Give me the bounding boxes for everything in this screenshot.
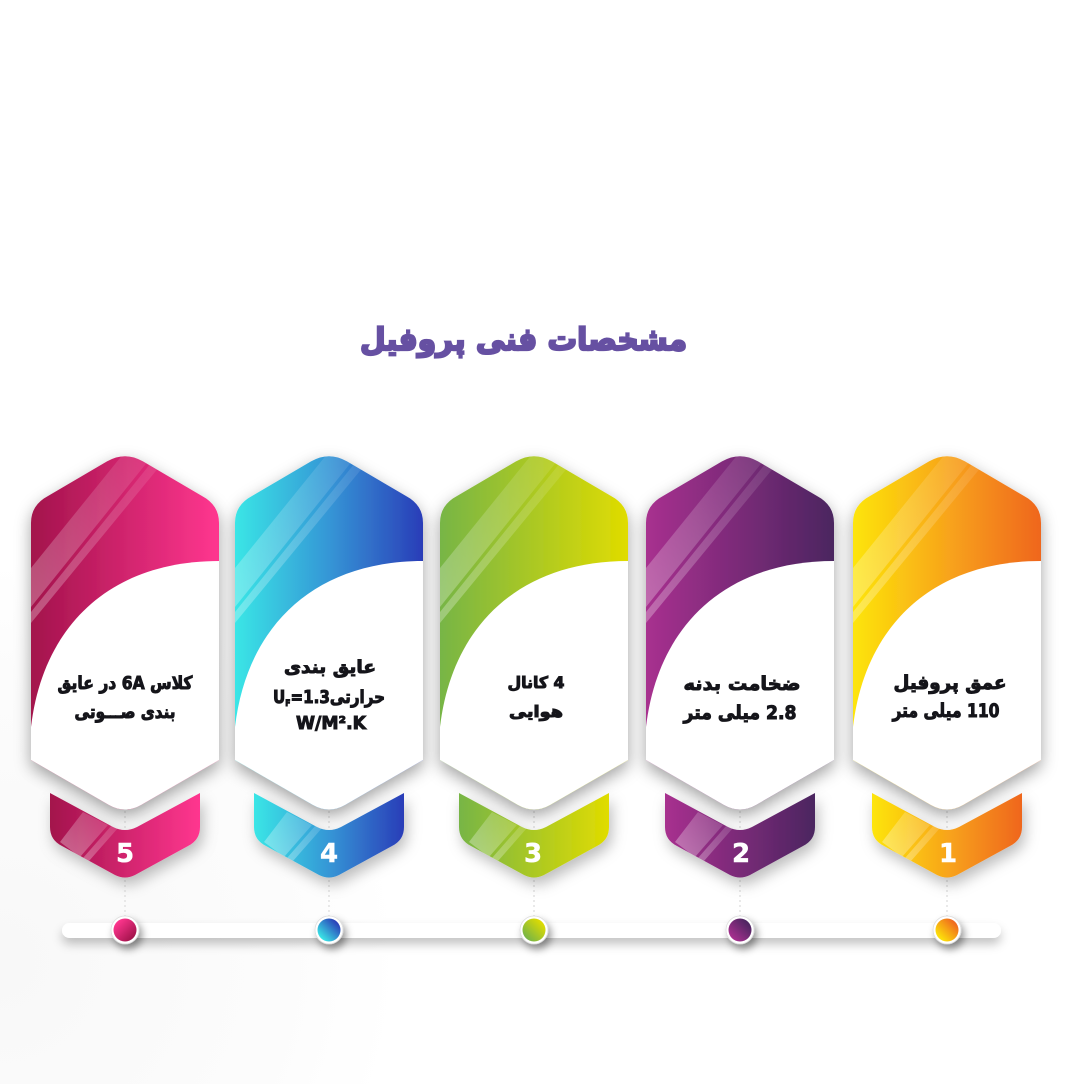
card 3 text	[508, 673, 564, 721]
card 5 text: بندی صـــوتی	[74, 702, 176, 723]
card 5 hexagon	[31, 456, 219, 810]
card 2 number tab: 2	[732, 839, 750, 869]
card 1 number tab: 1	[939, 839, 957, 869]
card 5 number tab	[50, 793, 200, 878]
card 1 text: عمق پروفیل	[894, 672, 1006, 694]
timeline bar	[62, 923, 1001, 938]
card 2 number tab	[665, 793, 815, 878]
card 4: thermal insulation	[235, 448, 423, 878]
card 4 number tab	[254, 793, 404, 878]
card 1: profile depth	[853, 448, 1041, 878]
card 4 hexagon	[235, 456, 423, 810]
card 2 white body	[646, 561, 834, 810]
card 5 number tab: 5	[116, 839, 134, 869]
card 1 text	[892, 672, 1006, 722]
card 3 text: 4 کانال	[508, 673, 564, 692]
card 4 text: عایق بندی	[284, 657, 376, 678]
timeline node 3	[520, 916, 548, 944]
connector dots	[125, 811, 947, 917]
card 4 gloss	[235, 456, 361, 623]
card 2 text: 2.8 میلی متر	[683, 702, 796, 724]
card 3: air channels	[440, 448, 628, 878]
card 1 white body	[853, 561, 1041, 810]
title: مشخصات فنی پروفیل	[360, 322, 687, 358]
card 1 text: 110 میلی متر	[892, 700, 999, 722]
card 5 text: کلاس 6A در عایق	[58, 673, 193, 694]
card 2 hexagon	[646, 456, 834, 810]
card 4 number tab: 4	[320, 839, 338, 869]
timeline node 4	[315, 916, 343, 944]
card 4 text: W/M².K	[296, 713, 367, 734]
card 5: sound insulation	[31, 448, 219, 878]
card 2 text: ضخامت بدنه	[684, 673, 800, 695]
card 2: body thickness	[646, 448, 834, 878]
card 1 number tab	[872, 793, 1022, 878]
card 1 gloss	[853, 456, 979, 623]
timeline node 1	[933, 916, 961, 944]
card 3 text: هوایی	[509, 702, 563, 721]
card 4 text	[273, 657, 385, 734]
timeline node 2	[726, 916, 754, 944]
card 3 hexagon	[440, 456, 628, 810]
card 5 text	[58, 673, 193, 723]
card 4 text: حرارتی1.3=U	[273, 687, 396, 708]
card 5 white body	[31, 561, 219, 810]
card 3 number tab	[459, 793, 609, 878]
card 1 hexagon	[853, 456, 1041, 810]
card 2 gloss	[646, 456, 772, 623]
card 3 gloss	[440, 456, 566, 623]
card 3 white body	[440, 561, 628, 810]
card 2 text	[683, 673, 800, 724]
card 3 number tab: 3	[524, 839, 542, 869]
card 5 gloss	[31, 456, 157, 623]
card 4 white body	[235, 561, 423, 810]
card 4 text: F	[285, 699, 290, 709]
timeline node 5	[111, 916, 139, 944]
